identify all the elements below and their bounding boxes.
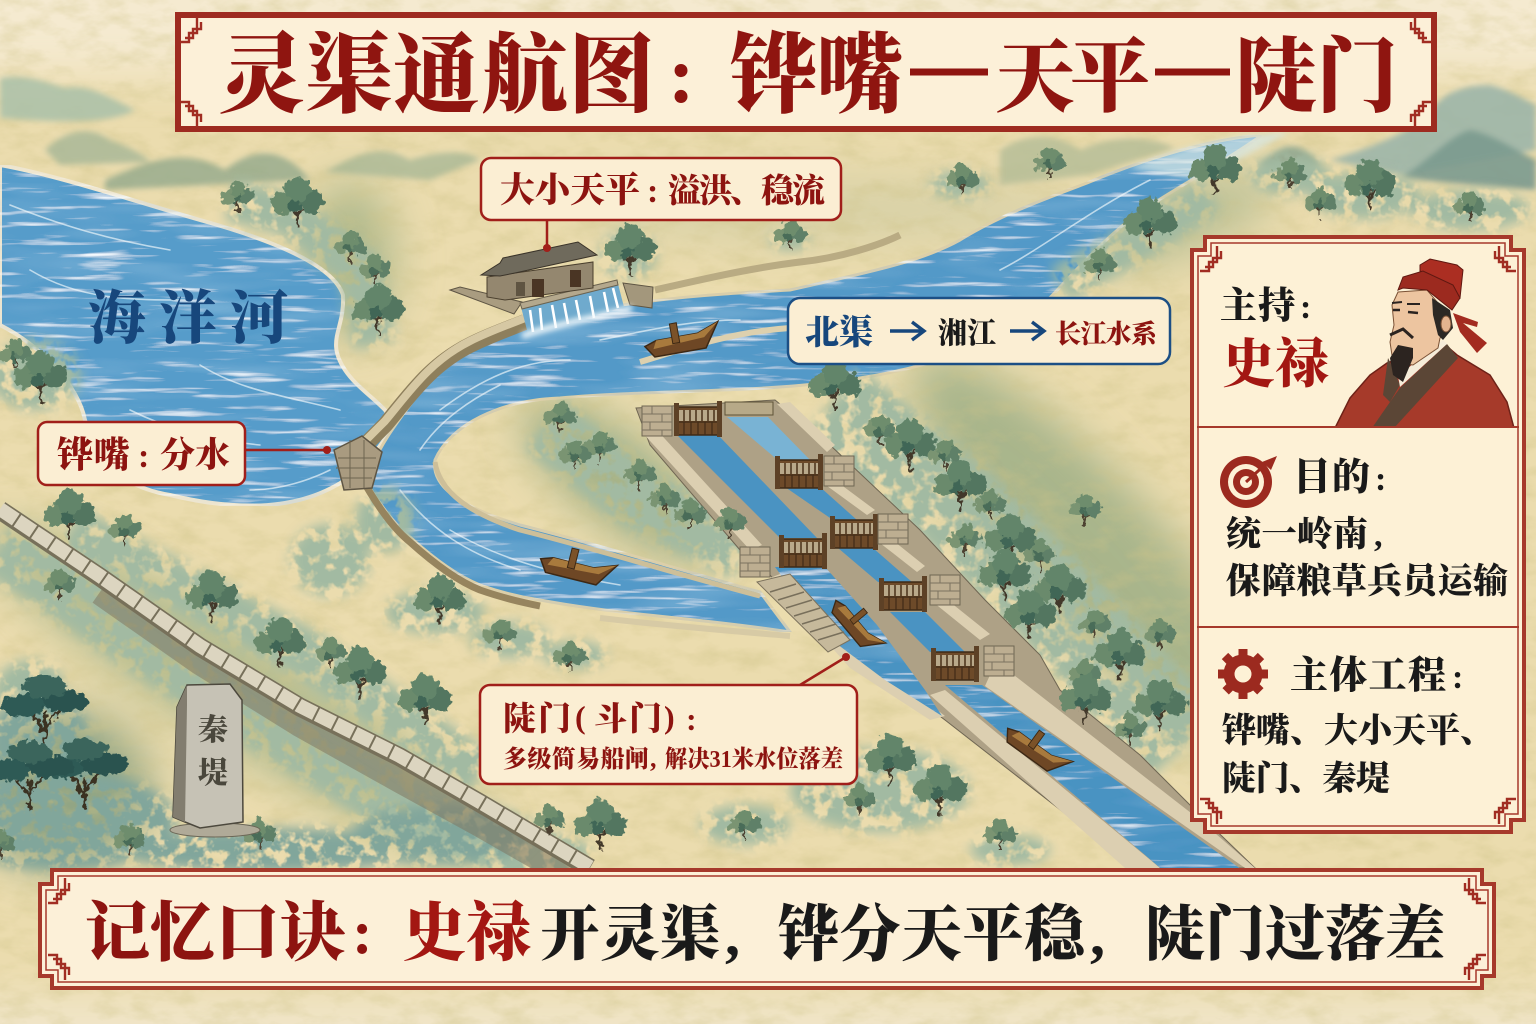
section: 目的: 目的 <box>1293 457 1370 499</box>
callout: 铧嘴: : <box>138 438 149 475</box>
fenshui spade (huazui) <box>334 436 382 490</box>
boats <box>538 316 1076 780</box>
callout: 北渠 route: 长江水系 <box>1055 320 1158 349</box>
callout: 北渠 route: 湘江 <box>938 317 996 350</box>
icon: target <box>1220 456 1277 508</box>
callout: 大小天平: 大小天平 <box>500 171 640 210</box>
section: 主持 史禄: 史禄 <box>1222 335 1329 394</box>
Qin dike stele: 秦 <box>198 714 228 747</box>
section: 目的: : <box>1375 461 1386 498</box>
trees and shrubs <box>0 144 1486 860</box>
callout: 铧嘴: 分水 <box>160 436 230 475</box>
mnemonic banner: 铧分天平稳 <box>778 901 1091 969</box>
mnemonic banner: 史禄 <box>402 898 531 969</box>
section: 主体工程: 主体工程 <box>1290 655 1446 697</box>
section: 主持 史禄: 主持 <box>1220 285 1295 327</box>
section: 主持 史禄: : <box>1300 289 1311 326</box>
icon: gear <box>1218 649 1268 699</box>
info panel <box>1192 237 1524 832</box>
title banner <box>178 15 1434 129</box>
stone dike: fenshui embankment <box>360 235 900 636</box>
tianping weir and pavilion <box>450 242 653 336</box>
mnemonic banner: 记忆口诀 <box>85 898 345 970</box>
mnemonic banner: : <box>352 899 373 967</box>
callout: 大小天平 <box>481 158 841 252</box>
title banner: : <box>668 32 695 120</box>
section: 主持 史禄 <box>1220 285 1329 394</box>
arrow <box>1010 322 1044 340</box>
callout: 陡门: 陡门 <box>503 701 571 738</box>
section: 目的: 统一岭南 <box>1226 515 1368 554</box>
lock walls tops <box>640 402 1255 868</box>
callout: 陡门: 解决31米水位落差 <box>665 746 843 773</box>
water highlights <box>10 180 1150 585</box>
mnemonic banner <box>40 870 1494 988</box>
Qin dike wall <box>0 509 590 887</box>
scrub vegetation <box>0 155 1530 875</box>
title banner: 陡门 <box>1235 32 1398 123</box>
arrow <box>890 322 924 340</box>
dark foliage, lower left <box>0 695 530 872</box>
title banner: 铧嘴 <box>730 27 904 124</box>
callout: 陡门: ( <box>575 699 586 735</box>
Qin dike stele <box>170 684 260 837</box>
callout: 北渠 route: 北渠 <box>805 313 873 352</box>
Qin dike stele: 堤 <box>198 757 228 790</box>
mnemonic banner: , <box>725 902 740 968</box>
canal waters: north and south channels <box>365 135 1262 632</box>
callout: 铧嘴 <box>38 422 331 485</box>
callout: 陡门: ) <box>664 699 675 735</box>
callout: 大小天平: : <box>647 173 658 210</box>
mnemonic banner: 陡门过落差 <box>1145 902 1445 968</box>
lock gates <box>642 401 1014 682</box>
title banner: 天平 <box>995 35 1150 123</box>
title banner: 灵渠通航图 <box>218 27 655 124</box>
callout: 北渠 route <box>788 298 1170 364</box>
section: 目的: 保障粮草兵员运输 <box>1226 562 1508 601</box>
mnemonic banner: , <box>1090 902 1105 968</box>
section: 主体工程: : <box>1452 659 1463 696</box>
section: 主体工程: 铧嘴、大小天平、 <box>1222 712 1494 750</box>
river: Haiyang He <box>0 165 389 506</box>
callout: 大小天平: 溢洪、稳流 <box>668 173 827 210</box>
callout: 陡门: : <box>686 701 697 737</box>
portrait of Shi Lu <box>1335 259 1514 428</box>
river label: 海洋河: 海洋河 <box>88 286 288 351</box>
callout: 陡门: 斗门 <box>594 701 662 738</box>
callout: 陡门: 多级简易船闸 <box>503 745 649 773</box>
stone steps <box>757 574 850 652</box>
section: 目的 <box>1220 456 1508 601</box>
pale distant river end <box>1130 132 1290 180</box>
callout: 陡门 <box>480 653 857 784</box>
lock channel waters <box>677 417 1245 872</box>
mnemonic banner: 开灵渠 <box>540 901 720 968</box>
lock complex stone platform <box>636 400 1255 868</box>
mountains <box>0 77 1536 190</box>
section: 主体工程 <box>1218 649 1494 798</box>
callout: 陡门: , <box>650 744 656 773</box>
callout: 铧嘴: 铧嘴 <box>57 435 130 475</box>
section: 主体工程: 陡门、秦堤 <box>1222 760 1390 798</box>
section: 目的: , <box>1374 517 1382 554</box>
